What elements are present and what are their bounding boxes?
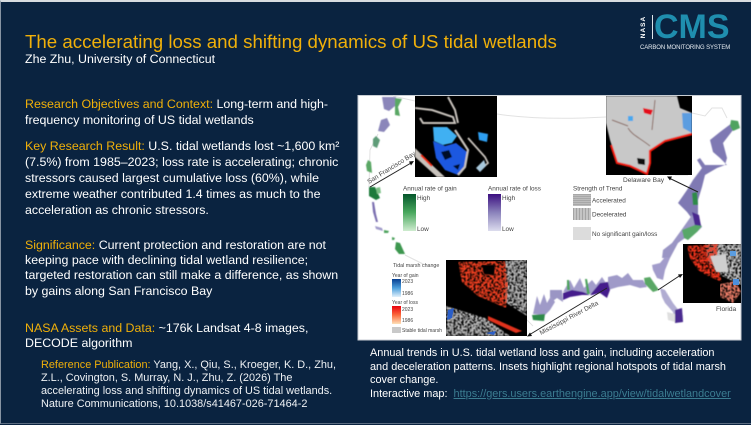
legend: strength of trend: Strength of Trend <box>573 186 623 192</box>
legend: annual rate of gain: High <box>417 195 431 202</box>
logo NASA wordmark: NASA <box>640 16 647 38</box>
legend: strength of trend: Decelerated <box>592 212 627 218</box>
legend: tidal marsh change: 2023 <box>402 279 413 285</box>
arrow: Delaware Bay <box>667 176 698 192</box>
caption: cover change. <box>370 374 438 386</box>
legend: tidal marsh change: Tidal marsh change <box>393 263 439 269</box>
legend: annual rate of loss: Low <box>502 226 514 233</box>
caption: and deceleration patterns. Insets highlight regional hotspots of tidal marsh <box>370 360 726 372</box>
inset: Delaware Bay <box>606 96 692 175</box>
title: The accelerating loss and shifting dynamics of US tidal wetlands <box>25 31 557 52</box>
text: key research result: stressors caused largest cumulative loss (60%), while <box>25 171 319 185</box>
inset: Florida <box>683 244 741 303</box>
legend: tidal marsh change: Stable tidal marsh <box>402 328 442 334</box>
label: Florida: Florida <box>716 306 736 313</box>
caption <box>370 347 731 400</box>
text: key research result: acceleration as chronic stressors. <box>25 203 209 217</box>
text: key research result: extreme weather contributed 1.4 times as much to the <box>25 187 320 201</box>
logo: NASA CMS <box>640 8 730 51</box>
caption: Annual trends in U.S. tidal wetland loss and gain, including acceleration <box>370 347 714 359</box>
legend: strength of trend <box>573 186 657 240</box>
legend: strength of trend: Accelerated <box>592 198 626 204</box>
label: Mississippi River Delta: Mississippi River Delta <box>539 300 600 337</box>
caption: Interactive map: https://gers.users.earthengine.app/view/tidalwetlandcover <box>370 388 731 400</box>
text: key research result <box>25 139 340 217</box>
legend: annual rate of gain: Annual rate of gain <box>403 186 457 192</box>
text: significance: keeping pace with declining tidal wetland resilience; <box>25 253 308 267</box>
text: research objectives: frequency monitoring of US tidal wetlands <box>25 112 254 126</box>
text: significance <box>25 238 338 298</box>
legend: annual rate of gain <box>403 186 457 233</box>
panel: map figure <box>358 95 742 340</box>
legend: tidal marsh change: 2023 <box>402 307 413 313</box>
legend: tidal marsh change: Year of loss <box>392 300 418 306</box>
text: key research result: Key Research Result: U.S. tidal wetlands lost ~1,600 km² <box>25 139 339 153</box>
panel background <box>358 96 741 340</box>
logo subtitle: CARBON MONITORING SYSTEM <box>640 45 730 51</box>
text: key research result: (7.5%) from 1985–2023; loss rate is accelerating; chronic <box>25 155 338 169</box>
text: research objectives <box>25 97 328 126</box>
arrow: San Francisco Bay <box>370 161 414 187</box>
text: reference publication: Nature Communications, 10.1038/s41467-026-71464-2 <box>41 398 307 410</box>
text: significance: targeted restoration can still make a difference, as shown <box>25 268 338 282</box>
text: significance: Significance: Current protection and restoration are not <box>25 238 326 252</box>
legend: annual rate of loss: Annual rate of loss <box>488 186 541 192</box>
legend: tidal marsh change <box>392 263 442 334</box>
legend: tidal marsh change: 1986 <box>402 318 413 324</box>
legend: strength of trend: No significant gain/loss <box>592 231 657 238</box>
label: Delaware Bay: Delaware Bay <box>623 177 665 184</box>
text: NASA assets and data <box>25 321 308 350</box>
text: NASA assets and data: NASA Assets and Data: ~176k Landsat 4-8 images, <box>25 321 308 335</box>
logo divider <box>652 15 653 39</box>
legend: annual rate of loss: High <box>502 195 516 202</box>
legend: tidal marsh change: 1986 <box>402 291 413 297</box>
inset: San Francisco Bay <box>415 96 497 177</box>
text: research objectives: Research Objectives and Context: Long-term and high- <box>25 97 328 111</box>
text: reference publication: Reference Publication: Yang, X., Qiu, S., Kroeger, K. D., Zhu, <box>41 358 336 370</box>
arrow: Mississippi River Delta <box>527 288 607 336</box>
inset: Mississippi River Delta <box>446 260 527 336</box>
text: reference publication: accelerating loss and shifting dynamics of US tidal wetlands. <box>41 384 332 396</box>
US outline <box>369 96 727 326</box>
label: San Francisco Bay: San Francisco Bay <box>366 150 418 186</box>
text: NASA assets and data: DECODE algorithm <box>25 336 132 350</box>
logo CMS wordmark: CMS <box>654 8 730 46</box>
map: east and gulf coast wetlands <box>532 120 740 323</box>
text: reference publication <box>41 358 336 410</box>
text: reference publication: Z.L., Covington, S. Murray, N. J., Zhu, Z. (2026) The <box>41 372 292 384</box>
author: Zhe Zhu, University of Connecticut <box>25 52 215 66</box>
legend: annual rate of gain: Low <box>417 226 429 233</box>
text: significance: by gains along San Francisco Bay <box>25 284 212 298</box>
arrow: Florida <box>658 274 683 290</box>
map: west coast wetlands <box>366 97 405 254</box>
legend: tidal marsh change: Year of gain <box>392 273 419 279</box>
legend: annual rate of loss <box>488 186 541 233</box>
